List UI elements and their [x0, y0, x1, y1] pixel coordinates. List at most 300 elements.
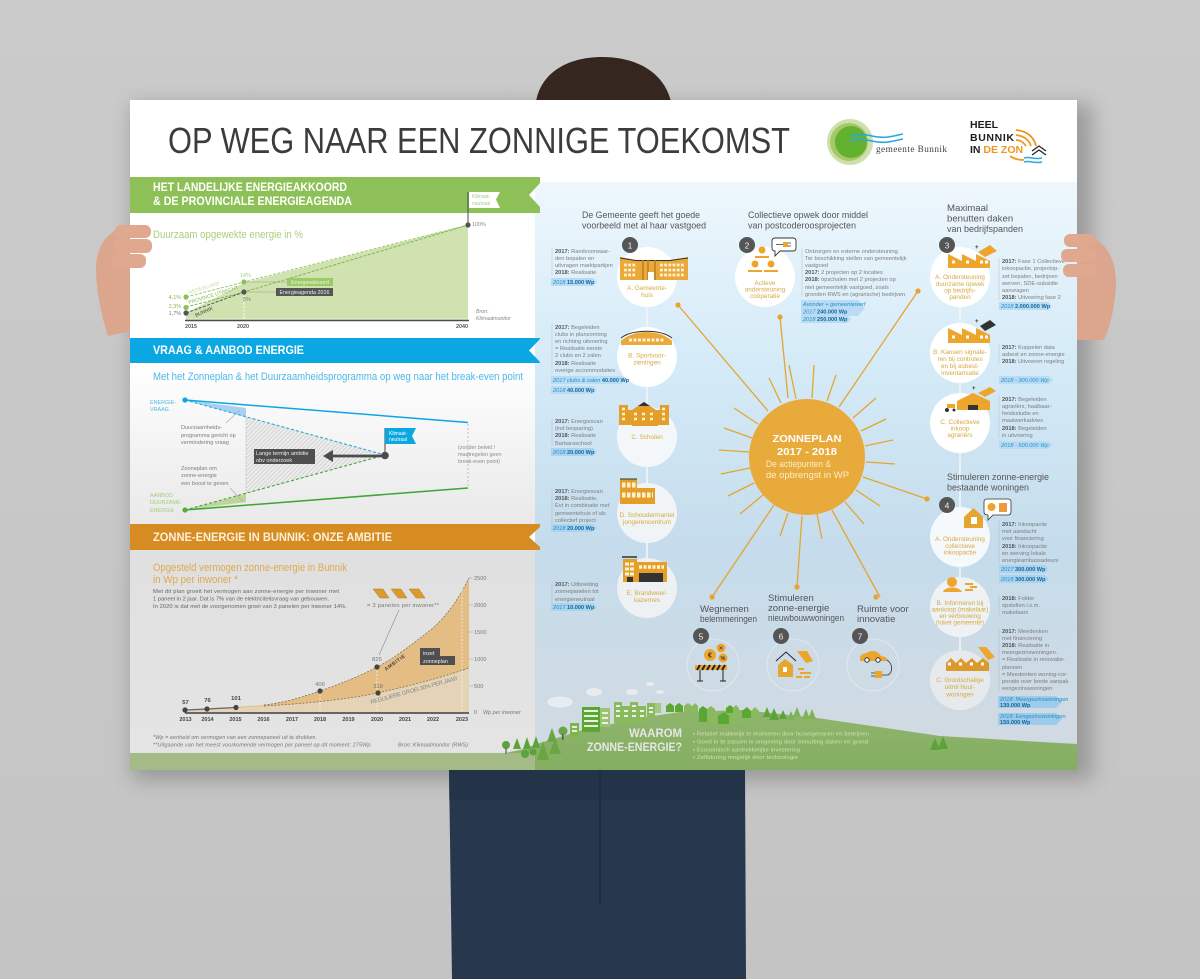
text 1B: 2017 clubs & zalen 40.000 Wp	[552, 378, 630, 384]
break-even chart: (zonder beleid /	[458, 445, 496, 451]
item 4A: collectieve	[945, 543, 975, 550]
item 3C: inkoop	[951, 426, 970, 432]
area chart: Wp per inwoner: 2021	[399, 717, 411, 723]
text 1B: overige accommodaties	[555, 368, 615, 374]
area chart: duurzame energie: Bron:	[476, 309, 489, 315]
text 3C: 2017: Begeleiden	[1002, 397, 1047, 403]
text 1B	[551, 323, 630, 394]
area chart: Wp per inwoner: 2015	[229, 717, 242, 723]
text 3A: 2018 2.000.000 Wp	[1000, 304, 1051, 310]
break-even chart: break-even point)	[458, 459, 500, 465]
text 4A: 2017 300.000 Wp	[1000, 567, 1046, 573]
text 4A: energieambassadeurs	[1002, 558, 1058, 564]
text 4C: eengezinswoningen	[1002, 686, 1052, 692]
break-even chart: obv onderzoek	[256, 458, 292, 464]
header banner blue: VRAAG & AANBOD ENERGIE	[153, 345, 304, 357]
text 4C: = Realisatie in renovatie-	[1002, 657, 1065, 663]
person: jeans below poster	[449, 770, 746, 979]
text 4B: 2018: Folder	[1002, 596, 1034, 602]
break-even chart: Lange termijn ambitie	[256, 451, 309, 457]
area chart: Wp per inwoner: 406	[315, 682, 325, 688]
text 4A: 2017: Inkoopactie	[1002, 522, 1047, 528]
area chart: Wp per inwoner: 2014	[201, 717, 215, 723]
sun: rays	[675, 288, 930, 600]
text 1A: den bepalen en	[555, 256, 594, 262]
item 3C: C. Collectieve	[940, 419, 980, 426]
text 3A: 2018: Uitvoering fase 2	[1002, 295, 1061, 301]
area chart: Wp per inwoner: AMBITIE	[384, 653, 407, 673]
waarom zonne-energie heading	[587, 726, 682, 754]
text 2: 2017: 2 projecten op 2 locaties	[805, 270, 883, 276]
text 1B: 2018 40.000 Wp	[552, 388, 595, 394]
paragraph: In 2020 is dat met de voorgenomen groei van 3 panelen per inwoner 14%.	[153, 604, 347, 610]
chart heading: Opgesteld vermogen zonne-energie in Bunnik	[153, 562, 348, 574]
text 2: 2018: opschalen met 2 projecten op	[805, 277, 896, 283]
column 4: Bestaande woningen	[930, 472, 1069, 726]
item 3A: panden	[949, 294, 971, 301]
area chart: Wp per inwoner: 2013	[179, 717, 192, 723]
area chart: Wp per inwoner: 2000	[474, 603, 486, 609]
text 3A: 2017: Fase 1 Collectieve	[1002, 259, 1065, 265]
text 1C: (ind besparing)	[555, 426, 593, 432]
text 4C: 2017: Meedenken	[1002, 629, 1048, 635]
chart heading: Met het Zonneplan & het Duurzaamheidsprogramma op weg naar het break-even point	[153, 371, 523, 383]
text 3B: 2017: Koppelen data	[1002, 345, 1056, 351]
text 4C: 2018: Eengezinswoningen	[999, 714, 1066, 720]
icon: barrier with coins: %	[721, 656, 726, 662]
text 2: Avonder + gemeentewerf	[802, 302, 867, 308]
sun: Zonneplan disc: de opbrengst in WP	[766, 470, 849, 481]
text 3B	[999, 344, 1065, 384]
sun: Zonneplan disc: 2017 - 2018	[777, 446, 837, 458]
area chart: Wp per inwoner: 2500	[474, 576, 486, 582]
text 1C	[551, 419, 603, 456]
item 4B: en verbouwing	[939, 613, 981, 620]
sun: Zonneplan disc: De actiepunten &	[766, 459, 832, 470]
text 1A: 2018: Realisatie	[555, 270, 596, 276]
item 5: belemmeringen: 5	[699, 632, 704, 642]
break-even chart: DUURZAME	[150, 500, 181, 506]
item 4B: (loket gemeente)	[936, 620, 984, 626]
text 1D: 2018: Realisatie,	[555, 496, 598, 502]
item 4C: uitrol huur-	[945, 684, 975, 691]
heading: Ruimte voor	[857, 604, 910, 615]
item 2 actieve ondersteuning: ondersteuning	[745, 286, 786, 294]
item 3A: duurzame opwek	[936, 281, 985, 288]
heading: benutten daken	[947, 214, 1013, 224]
person: hair above poster	[536, 57, 671, 102]
item 2 actieve ondersteuning	[735, 237, 796, 307]
heading	[582, 210, 706, 232]
break-even chart: programma gericht op	[181, 433, 236, 439]
poster	[130, 100, 1077, 770]
text 3C	[999, 396, 1053, 449]
break-even chart: vermindering vraag	[181, 440, 229, 446]
area chart: Wp per inwoner: 2023	[456, 717, 468, 723]
waarom zonne-energie heading: ZONNE-ENERGIE?	[587, 740, 682, 754]
text 4C: poratie over brede aanpak	[1002, 679, 1069, 685]
person: right hand palm	[1072, 236, 1116, 340]
title: OP WEG NAAR EEN ZONNIGE TOEKOMST	[168, 120, 790, 161]
town: apartment blocks	[570, 702, 661, 737]
logo: Heel Bunnik in de zon	[970, 119, 1046, 163]
text 1C: 2018: Realisatie	[555, 433, 596, 439]
break-even chart	[150, 397, 501, 514]
item 1B sportvoorzieningen	[617, 327, 677, 387]
item 1C scholen	[617, 402, 677, 467]
item 4C	[930, 647, 995, 710]
item 3B: en bij asbest-	[941, 363, 979, 370]
text 4B: opstellen i.s.m.	[1002, 603, 1040, 609]
icon: barrier with coins: ✕	[718, 646, 724, 652]
heading: nieuwbouwwoningen	[768, 613, 844, 624]
area chart: duurzame energie: PROVINCE UTRECHT	[188, 285, 239, 306]
area chart: Wp per inwoner	[179, 576, 521, 723]
item 4A	[930, 497, 1011, 567]
break-even chart: VRAAG	[150, 407, 169, 413]
text 1E: 2017 10.000 Wp	[552, 605, 595, 611]
text 1D: gemeentehuis of als	[555, 511, 606, 517]
header banner green	[130, 177, 540, 213]
text 4A: voor financiering	[1002, 536, 1044, 542]
text 3C: in uitvoering	[1002, 433, 1033, 439]
chart heading	[153, 562, 348, 586]
item 1B sportvoorzieningen: B. Sportvoor-	[628, 352, 666, 360]
item 7: innovatie	[847, 604, 910, 691]
item 4B	[930, 577, 990, 637]
heading: van bedrijfspanden	[947, 224, 1023, 235]
area chart: Wp per inwoner: 2016	[257, 717, 270, 723]
area chart: duurzame energie: Klimaat-	[472, 194, 491, 200]
text 3C: heidsstudie en	[1002, 411, 1039, 417]
column connectors	[647, 300, 960, 660]
text 2: 2017 240.000 Wp	[802, 310, 848, 316]
area chart: Wp per inwoner: inzet	[423, 651, 435, 657]
footnotes: *Wp = eenheid om vermogen van een zonnepaneel uit te drukken.	[153, 735, 317, 741]
area chart: duurzame energie: 2020	[237, 324, 249, 330]
text 4C: 2018: Realisatie in	[1002, 643, 1049, 649]
area chart: Wp per inwoner: 76	[204, 698, 211, 704]
text 4B	[999, 595, 1040, 616]
item 1A gemeentehuis: A. Gemeente-	[627, 285, 667, 292]
item 1D Schoudermantel	[617, 479, 677, 543]
item 3A: A. Ondersteuning	[935, 274, 985, 281]
area chart: duurzame energie: NEDERLAND	[188, 281, 221, 296]
text 4A: 2018 300.000 Wp	[1000, 577, 1046, 583]
text 1C: 2018 20.000 Wp	[552, 450, 595, 456]
header banner green: & DE PROVINCIALE ENERGIEAGENDA	[153, 196, 352, 208]
heading	[768, 593, 844, 624]
poster base	[130, 100, 1077, 770]
section 3: Zonne-energie in Bunnik	[130, 524, 540, 748]
area chart: Wp per inwoner: 101	[231, 696, 242, 702]
footnotes	[153, 735, 468, 748]
text 4A	[999, 521, 1058, 583]
item 3A: 3	[945, 240, 950, 250]
text 3C: 2018 - 500.000 Wp	[1000, 443, 1049, 449]
panels caption: = 3 panelen per inwoner**	[367, 603, 440, 609]
item 3C: +	[972, 386, 976, 392]
heading	[857, 604, 910, 625]
text 4C: met financiering	[1002, 636, 1042, 642]
heading	[748, 210, 868, 232]
break-even chart: zonne-energie	[181, 473, 217, 479]
item 4C: woningen	[945, 692, 974, 698]
text 1B: en richting uitvoering	[555, 339, 607, 345]
text 3A: zet bepalen, bedrijven	[1002, 274, 1058, 280]
text 1B: clubs in planvorming	[555, 332, 607, 338]
text 1C: Barbaraschool	[555, 441, 592, 447]
item 3B: +	[975, 319, 979, 325]
item 4A: A. Ondersteuning	[935, 536, 985, 543]
text 2	[801, 248, 907, 323]
column 1: Gemeente vastgoed	[551, 210, 706, 618]
text 4A: met aandacht	[1002, 529, 1037, 535]
footnotes: **Uitgaande van het meest voorkomende vermogen per paneel op dit moment: 275Wp.	[153, 742, 372, 748]
break-even chart: Duurzaamheids-	[181, 425, 222, 431]
text 4C: = Meedenken woning-cor-	[1002, 672, 1068, 678]
break-even chart: Zonneplan om	[181, 466, 217, 472]
text 1D: Evt in combinatie met	[555, 503, 610, 509]
item 4A: inkoopactie	[944, 550, 977, 556]
person: left fingers over poster	[112, 225, 152, 268]
text 4A: 2018: Inkoopactie	[1002, 544, 1047, 550]
icon: barrier with coins: €	[708, 652, 712, 660]
area chart: Wp per inwoner: 2017	[286, 717, 298, 723]
item 3A: op bedrijfs-	[944, 288, 976, 294]
item 3B	[930, 319, 996, 383]
area chart: duurzame energie	[169, 192, 511, 330]
text 1E: 2017: Uitbreiding	[555, 582, 598, 588]
text 2: niet gemeentelijk vastgoed, zoals	[805, 285, 889, 291]
text 1D: 2017: Energiescan	[555, 489, 603, 495]
text 2: Ontzorgen en externe ondersteuning.	[805, 249, 900, 255]
text 3B: 2018: Uitvoeren regeling	[1002, 359, 1064, 365]
item 6: nieuwbouwwoningen	[767, 593, 844, 691]
area chart: duurzame energie: 1,7%	[169, 311, 181, 317]
text 3C: maatwerkadvies	[1002, 418, 1043, 424]
item 2 actieve ondersteuning: 2	[745, 240, 750, 250]
heading: De Gemeente geeft het goede	[582, 210, 700, 221]
heading	[947, 472, 1049, 494]
area chart: duurzame energie: 14%	[240, 273, 251, 279]
item 1E Brandweerkazernes: kazernes	[634, 597, 660, 604]
logo: Heel Bunnik in de zon: IN DE ZON	[970, 144, 1023, 156]
waarom list: • Zelfsturing mogelijk door technologie	[693, 755, 798, 761]
text 1E: energieneutraal	[555, 597, 595, 603]
heading: Maximaal	[947, 203, 988, 214]
waarom list	[693, 732, 869, 761]
text 2: vastgoed	[805, 263, 828, 269]
area chart: duurzame energie: Energieagenda 2016	[279, 290, 330, 296]
section 2: Vraag en aanbod	[130, 338, 540, 514]
text 3C: 2018: Begeleiden	[1002, 426, 1047, 432]
logo: gemeente Bunnik	[827, 119, 947, 165]
text 1B: = Realisatie eerste	[555, 346, 602, 352]
text 4C	[998, 628, 1069, 726]
break-even chart: neutraal	[389, 437, 407, 443]
text 1B: 2017: Begeleiden	[555, 325, 600, 331]
item 2 actieve ondersteuning: Actieve	[755, 280, 776, 287]
paragraph: Met dit plan groeit het vermogen aan zonne-energie per inwoner met	[153, 589, 339, 595]
column 2: Collectieve opwek	[735, 210, 907, 323]
icon: barrier with coins	[695, 644, 728, 681]
area chart: duurzame energie: 100%	[472, 222, 486, 228]
logo: gemeente Bunnik: gemeente Bunnik	[876, 144, 947, 154]
text 1A: 2017: Randvoorwaar-	[555, 249, 610, 255]
item 4B: B. Informeren bij	[937, 600, 983, 607]
text 4C: 150.000 Wp	[1000, 720, 1031, 726]
text 3B: asbest en zonne-energie	[1002, 352, 1065, 358]
text 3A	[999, 258, 1065, 310]
text 3C: agrariërs, haalbaar-	[1002, 404, 1052, 410]
ground strip left	[130, 753, 535, 770]
item 1C scholen: C. Scholen	[631, 434, 663, 441]
area chart: duurzame energie: Energieakkoord	[291, 280, 329, 286]
heading	[700, 604, 757, 625]
text 2: 2018 250.000 Wp	[802, 317, 848, 323]
text 3A: inkoopactie, projectop-	[1002, 266, 1059, 272]
area chart: Wp per inwoner: 2018	[314, 717, 326, 723]
area chart: Wp per inwoner: 318	[373, 684, 383, 690]
text 4C: 2018: Meergezinswoningen	[999, 697, 1068, 703]
item 1B sportvoorzieningen: zieningen	[633, 360, 661, 366]
item 1A gemeentehuis	[617, 237, 688, 307]
text 1A: 2018 15.000 Wp	[552, 280, 595, 286]
section backgrounds	[130, 363, 535, 755]
text 1A: uitvragen marktpartijen	[555, 263, 613, 269]
person: right fingers over poster	[1061, 234, 1097, 277]
icon: electric car with plug	[860, 651, 892, 678]
heading: voorbeeld met al haar vastgoed	[582, 220, 706, 232]
ground: hill	[130, 710, 1077, 770]
item 2 actieve ondersteuning: coöperatie	[750, 293, 780, 300]
area chart: Wp per inwoner: Wp per inwoner	[483, 710, 521, 716]
icon: house with panel and bricks	[776, 651, 813, 677]
waarom zonne-energie heading: WAAROM	[629, 726, 682, 740]
area chart: Wp per inwoner: 500	[474, 684, 483, 690]
text 1E: zonnepanelen tot	[555, 589, 599, 595]
item 3B: inventarisatie	[941, 370, 979, 377]
heading	[947, 203, 1023, 235]
heading: innovatie	[857, 614, 895, 625]
item 1A gemeentehuis: 1	[628, 240, 633, 250]
sun: Zonneplan disc: ZONNEPLAN	[772, 433, 842, 445]
area chart: Wp per inwoner: 0	[474, 710, 477, 716]
text 1A	[551, 248, 613, 286]
heading: Collectieve opwek door middel	[748, 210, 868, 221]
heading: Stimuleren	[768, 593, 814, 604]
area chart: Wp per inwoner: 1000	[474, 657, 486, 663]
heading: belemmeringen	[700, 614, 757, 625]
break-even chart: Klimaat-	[389, 431, 408, 437]
heading: zonne-energie	[768, 603, 829, 614]
chart heading: in Wp per inwoner *	[153, 574, 239, 586]
sun: Zonneplan disc	[749, 399, 865, 515]
text 1C: 2017: Energiescan	[555, 419, 603, 425]
icon: three solar panels	[373, 589, 425, 598]
paragraph: 1 paneel in 2 jaar. Dat is 7% van de elektriciteitsvraag van gebouwen.	[153, 596, 329, 602]
text 2: gronden RWS en (agrarische) bedrijven	[805, 292, 905, 298]
area chart: Wp per inwoner: zonneplan	[423, 659, 448, 665]
trees	[502, 707, 948, 760]
area chart: Wp per inwoner: 57	[182, 700, 189, 706]
clouds	[547, 682, 664, 708]
text 3A: aanvragen	[1002, 288, 1029, 294]
area chart: duurzame energie: 2,3%	[169, 304, 181, 310]
area chart: Wp per inwoner: REGULIERE GROEI 30% PER JAAR	[370, 676, 458, 706]
waarom list: • Goed in te passen in omgeving door benutting daken en grond	[693, 740, 868, 746]
text 1D: collectief project	[555, 518, 596, 524]
area chart: Wp per inwoner: 825	[372, 657, 382, 663]
text 4C: meergezinswoningen.	[1002, 650, 1058, 656]
item 1E Brandweerkazernes	[617, 557, 677, 618]
item 3B: B. Kansen signale-	[933, 349, 987, 356]
item 7: innovatie: 7	[858, 632, 863, 642]
break-even chart: ENERGIE-	[150, 400, 176, 406]
text 3A: werven, SDE-subsidie	[1001, 281, 1058, 287]
text 3B: 2018 - 300.000 Wp	[1000, 378, 1049, 384]
item 3B: ren bij controles	[937, 356, 983, 363]
item 4A: 4	[945, 500, 950, 510]
text 4C: plannen	[1002, 665, 1022, 671]
logo: Heel Bunnik in de zon: HEEL	[970, 119, 999, 131]
area chart: duurzame energie: Klimaatmonitor	[476, 316, 511, 322]
footnotes: Bron: Klimaatmonitor (RWS)	[398, 742, 468, 748]
poster shadow	[132, 104, 1092, 780]
break-even chart: een boost te geven	[181, 481, 229, 487]
heading: bestaande woningen	[947, 482, 1029, 494]
item 3C	[930, 386, 996, 453]
break-even chart: AANBOD	[150, 493, 173, 499]
heading: Stimuleren zonne-energie	[947, 472, 1049, 483]
item 6: nieuwbouwwoningen: 6	[779, 632, 784, 642]
logo: Heel Bunnik in de zon: BUNNIK	[970, 132, 1014, 144]
text 1B: 2018: Realisatie	[555, 361, 596, 367]
paragraph	[153, 589, 347, 610]
heading: Wegnemen	[700, 604, 749, 615]
text 1B: 2 clubs en 2 zalen	[555, 353, 601, 359]
item 4B: aankoop (makelaar)	[932, 606, 988, 614]
item 3A	[930, 237, 997, 307]
area chart: Wp per inwoner: 2020	[371, 717, 383, 723]
break-even chart: maatregelen geen	[458, 452, 501, 458]
text 1D: 2018 20.000 Wp	[552, 526, 595, 532]
item 1D Schoudermantel: jongerencentrum	[622, 519, 671, 526]
area chart: Wp per inwoner: 2019	[342, 717, 355, 723]
break-even chart: ENERGIE	[150, 508, 175, 514]
chart heading: Duurzaam opgewekte energie in %	[153, 229, 303, 241]
area chart: Wp per inwoner: 2022	[427, 717, 439, 723]
column 3: Daken bedrijfspanden	[930, 203, 1065, 453]
item 4C: C. Grootschalige	[936, 677, 984, 684]
text 1D	[551, 489, 610, 532]
header banner blue	[130, 338, 540, 363]
right panel sky	[535, 182, 1077, 770]
area chart: duurzame energie: 2040	[456, 324, 468, 330]
area chart: duurzame energie: 5%	[243, 297, 251, 303]
text 1E	[551, 582, 599, 611]
text 4C: 130.000 Wp	[1000, 703, 1031, 709]
area chart: duurzame energie: 4,1%	[169, 295, 181, 301]
text 2: Ter beschikking stellen van gemeentelijk	[805, 256, 907, 262]
area chart: Wp per inwoner: 1500	[474, 630, 486, 636]
area chart: duurzame energie: neutraal	[472, 201, 490, 207]
town: houses	[666, 703, 759, 724]
waarom list: • Relatief makkelijk te realiseren door huiseigenaren en bedrijven	[693, 732, 869, 738]
heading: van postcoderoosprojecten	[748, 220, 856, 232]
waarom list: • Economisch aantrekkelijke investering	[693, 748, 800, 754]
